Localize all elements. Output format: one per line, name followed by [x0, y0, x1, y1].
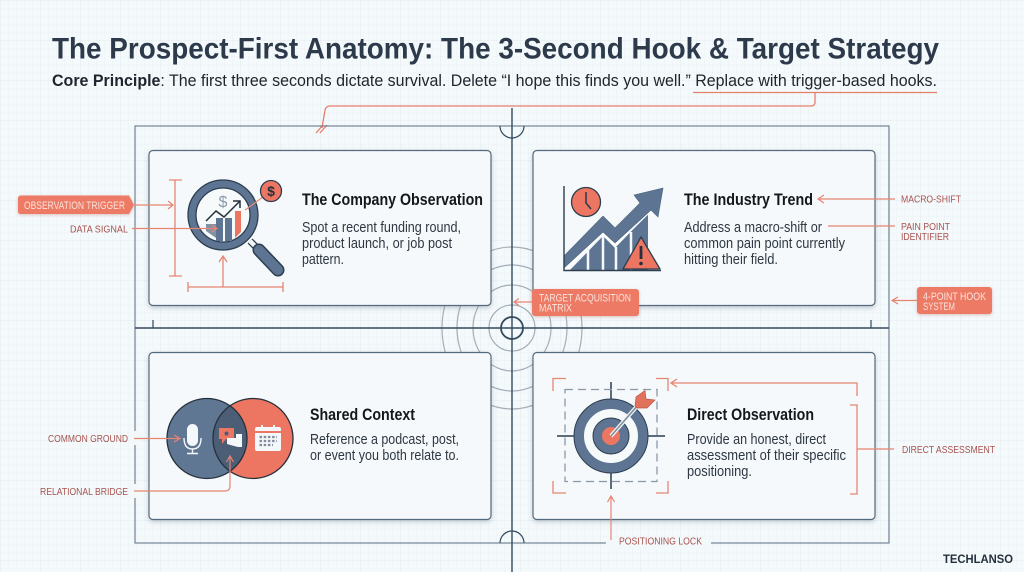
callout: common ground: [48, 431, 180, 445]
icon: microphone: [184, 424, 201, 454]
body text: positioning.: [687, 464, 752, 480]
body text: pattern.: [302, 252, 344, 268]
callout: data signal: [70, 224, 217, 236]
callout: 4-point hook system: SYSTEM: [923, 301, 955, 313]
dimension brackets: [169, 180, 283, 292]
callout: pain point identifier: IDENTIFIER: [901, 231, 949, 243]
body text: Address a macro-shift or: [684, 220, 822, 236]
callout: target acquisition matrix: TARGET ACQUISITION: [539, 292, 631, 304]
panel: shared context: [149, 352, 491, 520]
callout: target acquisition matrix: MATRIX: [539, 302, 573, 314]
blueprint frame and target crosshair: [135, 108, 889, 572]
icon: calendar: [255, 425, 281, 451]
callout: direct assessment: DIRECT ASSESSMENT: [902, 444, 995, 456]
callout: 4-point hook system: 4-POINT HOOK: [923, 291, 987, 303]
panel: the company observation: [149, 150, 491, 306]
icon: chat bubbles: [219, 428, 242, 447]
callout: data signal: DATA SIGNAL: [70, 224, 128, 236]
body text: [684, 220, 846, 268]
body text: common pain point currently: [684, 236, 846, 252]
callout: pain point identifier: PAIN POINT: [901, 221, 950, 233]
heading: Shared Context: [310, 405, 415, 424]
body text: [310, 432, 459, 464]
icon: magnifying glass with chart: $: [267, 183, 275, 199]
icon: magnifying glass with chart: $: [219, 194, 228, 211]
callout: macro-shift: MACRO-SHIFT: [901, 194, 961, 206]
callout: relational bridge: [40, 456, 234, 498]
icon: trend chart with clock and warning: [564, 186, 663, 271]
callout: positioning lock: POSITIONING LOCK: [619, 536, 702, 548]
body text: hitting their field.: [684, 252, 778, 268]
body text: or event you both relate to.: [310, 448, 459, 464]
body text: assessment of their specific: [687, 448, 847, 464]
bracket and arrow for assessment: [671, 379, 894, 494]
icon: target with arrow: [553, 378, 668, 493]
callout: positioning lock: [606, 496, 711, 549]
callout: observation trigger: OBSERVATION TRIGGER: [24, 200, 125, 212]
body text: Spot a recent funding round,: [302, 220, 461, 236]
title: The Prospect-First Anatomy: The 3-Second Hook & Target Strategy: [52, 32, 940, 66]
callout: pain point identifier: [828, 221, 950, 243]
heading: The Industry Trend: [684, 190, 813, 209]
icon: magnifying glass with chart: [188, 180, 282, 270]
heading: The Company Observation: [302, 190, 483, 209]
callout: observation trigger: [18, 196, 173, 214]
core principle subtitle: Core Principle: The first three seconds dictate survival. Delete “I hope this finds you well.” Replace with trigger-based hooks.: [52, 71, 937, 90]
callout: relational bridge: RELATIONAL BRIDGE: [40, 486, 128, 498]
callout: macro-shift: [818, 194, 961, 206]
icon: venn diagram: [167, 398, 293, 478]
logo: TECHLANSO: [943, 552, 1013, 566]
callout: 4-point hook system: [892, 287, 992, 314]
panel: the industry trend: [533, 150, 875, 306]
callout: common ground: COMMON GROUND: [48, 433, 128, 445]
body text: product launch, or job post: [302, 236, 452, 252]
heading: Direct Observation: [687, 405, 814, 424]
body text: [687, 432, 847, 480]
panel: direct observation: [533, 352, 894, 520]
body text: Reference a podcast, post,: [310, 432, 459, 448]
callout: target acquisition matrix: [514, 289, 639, 316]
body text: Provide an honest, direct: [687, 432, 826, 448]
body text: [302, 220, 461, 268]
connector from subtitle underline to frame: [316, 92, 937, 133]
